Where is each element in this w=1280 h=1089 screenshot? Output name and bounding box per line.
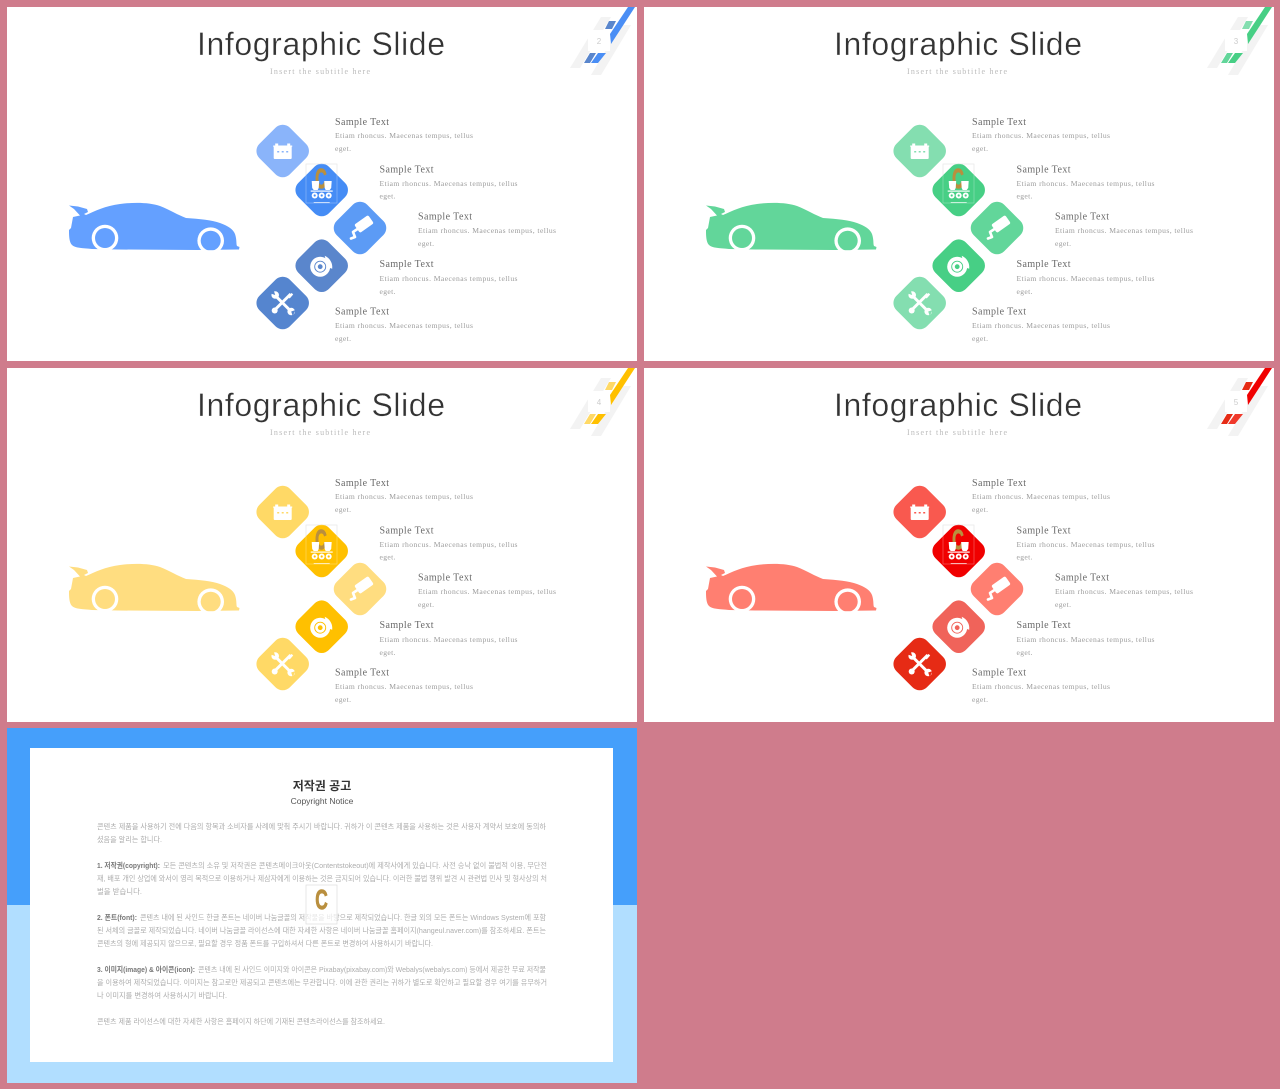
section 3: image and icon: 을 이용하여 제작되었습니다. 이미지는 참고로만 제공되고 콘텐츠에는 무관합니다. 이에 관한 권리는 귀하가 별도로 확인하고 필요할 경우 여기를 유무하거 — [97, 977, 547, 987]
item 4: brake disc — [928, 596, 1155, 657]
corner decoration with page number — [1207, 368, 1272, 436]
item 1: battery: Sample Text — [335, 478, 389, 489]
section 2: font: 된 서체의 글꼴로 제작되었습니다. 네이버 나눔글꼴 라이선스에 대한 자세한 사항은 네이버 나눔글꼴 홈페이지(hangeul.naver.com)를 참조하세요. 폰트는 — [97, 925, 546, 935]
section 1: copyright: 1. 저작권(copyright): — [97, 860, 160, 870]
corner decoration with page number — [1207, 7, 1272, 75]
item 1: battery: eget. — [972, 144, 988, 153]
item 4: brake disc: eget. — [1016, 648, 1033, 657]
item 3: muffler: Sample Text — [418, 212, 472, 222]
item 1: battery: Etiam rhoncus. Maecenas tempus, tellus — [972, 131, 1110, 140]
item 4: brake disc — [291, 596, 518, 657]
item 3: muffler: Sample Text — [418, 572, 472, 584]
item 5: tools: eget. — [972, 695, 988, 704]
corner decoration with page number — [570, 7, 635, 75]
item 2: pistons with watermark: Etiam rhoncus. Maecenas tempus, tellus — [380, 179, 518, 188]
item 4: brake disc: Sample Text — [380, 259, 434, 270]
item 5: tools — [889, 634, 1110, 704]
item 3: muffler — [330, 198, 556, 258]
item 3: muffler — [967, 559, 1193, 619]
item 3: muffler: Etiam rhoncus. Maecenas tempus, tellus — [1055, 587, 1193, 596]
item 2: pistons with watermark: Sample Text — [380, 526, 434, 536]
item 3: muffler: Sample Text — [1055, 572, 1109, 584]
item 5: tools: Sample Text — [972, 306, 1026, 318]
item 5: tools — [252, 273, 473, 343]
car silhouette — [706, 203, 876, 255]
item 2: pistons with watermark — [928, 160, 1155, 220]
subtitle: Insert the subtitle here — [270, 67, 370, 76]
item 4: brake disc: Sample Text — [1016, 620, 1071, 631]
item 3: muffler: eget. — [1055, 239, 1071, 248]
item 2: pistons with watermark: C — [952, 523, 964, 555]
corner decoration with page number: 2 — [597, 37, 602, 46]
item 1: battery: Etiam rhoncus. Maecenas tempus, tellus — [335, 492, 473, 501]
item 2: pistons with watermark: Etiam rhoncus. Maecenas tempus, tellus — [1016, 179, 1155, 188]
intro paragraph: 콘텐츠 제품을 사용하기 전에 다음의 항목과 소비자를 사례에 맞춰 주시기 바랍니다. 귀하가 이 콘텐츠 제품을 사용하는 것은 사용자 계약서 보호에 동의하 — [97, 821, 546, 831]
section 2: font: 2. 폰트(font): — [97, 913, 137, 922]
item 4: brake disc: Etiam rhoncus. Maecenas tempus, tellus — [380, 635, 518, 644]
item 1: battery: Etiam rhoncus. Maecenas tempus, tellus — [335, 131, 473, 140]
item 2: pistons with watermark: Etiam rhoncus. Maecenas tempus, tellus — [1016, 540, 1155, 549]
item 5: tools: Etiam rhoncus. Maecenas tempus, tellus — [335, 321, 473, 330]
section 1: copyright: 벌을 받습니다. — [97, 886, 142, 896]
section 1: copyright: 모든 콘텐츠의 소유 및 저작권은 콘텐츠메이크아웃(Contentstokeout)에 제작사에게 있습니다. 사전 승낙 없이 불법적 이용, 무단전 — [163, 860, 547, 870]
item 2: pistons with watermark: Sample Text — [1016, 164, 1071, 176]
item 1: battery — [889, 478, 1110, 542]
item 1: battery — [252, 478, 473, 542]
car silhouette — [69, 203, 240, 255]
item 2: pistons with watermark — [291, 521, 518, 581]
item 5: tools: Etiam rhoncus. Maecenas tempus, tellus — [972, 321, 1110, 330]
item 1: battery: Sample Text — [972, 478, 1026, 489]
item 3: muffler: Etiam rhoncus. Maecenas tempus, tellus — [418, 587, 556, 596]
item 2: pistons with watermark — [291, 160, 518, 220]
item 5: tools: eget. — [335, 334, 351, 343]
corner decoration with page number: 4 — [597, 398, 602, 407]
item 2: pistons with watermark: eget. — [380, 552, 396, 562]
panel: red slide — [644, 368, 1274, 722]
intro paragraph: 셨음을 알리는 합니다. — [97, 835, 162, 844]
item 1: battery — [252, 117, 473, 181]
item 2: pistons with watermark — [928, 521, 1155, 581]
closing line: 콘텐츠 제품 라이선스에 대한 자세한 사항은 홈페이지 하단에 기재된 콘텐츠라이선스를 참조하세요. — [97, 1016, 385, 1026]
panel: green slide — [644, 7, 1274, 361]
item 1: battery: Sample Text — [972, 117, 1026, 128]
item 2: pistons with watermark: Etiam rhoncus. Maecenas tempus, tellus — [380, 540, 518, 549]
section 3: image and icon — [97, 964, 547, 1000]
watermark frame — [306, 885, 337, 924]
item 3: muffler: Sample Text — [1055, 212, 1109, 222]
section 2: font: 콘텐츠의 형에 제공되지 않으므로, 필요할 경우 정품 폰트를 구입하셔서 다른 폰트로 변경하여 사용하시기 바랍니다. — [97, 938, 433, 948]
car silhouette — [69, 564, 240, 616]
item 5: tools: Sample Text — [972, 668, 1026, 678]
item 5: tools — [889, 273, 1110, 343]
item 4: brake disc: Sample Text — [1016, 259, 1071, 270]
item 4: brake disc: eget. — [380, 648, 396, 657]
subtitle: Insert the subtitle here — [907, 67, 1007, 76]
section 1: copyright: 재, 배포 개인 상업에 와서이 영리 목적으로 이용하거나 제삼자에게 이용하는 것은 금지되어 있습니다. 이러한 불법 행위 발견 시 관련법 민사 및 형사상의 처 — [97, 873, 547, 883]
item 2: pistons with watermark: eget. — [380, 192, 396, 200]
item 2: pistons with watermark: eget. — [1016, 552, 1033, 562]
item 2: pistons with watermark: eget. — [1016, 192, 1033, 200]
section 3: image and icon: 콘텐츠 내에 된 사인드 이미지와 아이콘은 Pixabay(pixabay.com)와 Webalys(webalys.com) 등에서 제공한 무료 저작물 — [198, 964, 546, 974]
item 1: battery: eget. — [335, 505, 351, 514]
item 1: battery: eget. — [335, 144, 351, 153]
section 1: copyright — [97, 860, 547, 896]
corner decoration with page number — [570, 368, 635, 436]
item 4: brake disc — [928, 235, 1155, 296]
item 3: muffler: eget. — [418, 600, 434, 609]
item 4: brake disc — [291, 235, 518, 296]
corner decoration with page number: 3 — [1234, 37, 1239, 46]
item 5: tools: Sample Text — [335, 668, 389, 678]
item 5: tools: Sample Text — [335, 306, 389, 318]
item 3: muffler: Etiam rhoncus. Maecenas tempus, tellus — [418, 226, 556, 235]
item 2: pistons with watermark: C — [315, 523, 327, 555]
item 5: tools: eget. — [972, 334, 988, 343]
item 4: brake disc: eget. — [380, 287, 396, 296]
item 2: pistons with watermark: C — [952, 162, 964, 194]
title: Infographic Slide — [197, 387, 445, 423]
item 1: battery: Sample Text — [335, 117, 389, 128]
item 3: muffler: Etiam rhoncus. Maecenas tempus, tellus — [1055, 226, 1193, 235]
panel: copyright notice — [7, 728, 637, 1083]
item 5: tools: eget. — [335, 695, 351, 704]
item 2: pistons with watermark: C — [315, 162, 327, 194]
item 2: pistons with watermark: Sample Text — [1016, 526, 1071, 536]
item 5: tools: Etiam rhoncus. Maecenas tempus, tellus — [335, 682, 473, 691]
subtitle: Insert the subtitle here — [907, 428, 1007, 437]
item 3: muffler — [330, 559, 556, 619]
car silhouette — [706, 564, 876, 616]
section 3: image and icon: 3. 이미지(image) & 아이콘(icon): — [97, 964, 195, 974]
item 1: battery — [889, 117, 1110, 181]
notice subheading: Copyright Notice — [291, 796, 354, 806]
item 5: tools: Etiam rhoncus. Maecenas tempus, tellus — [972, 682, 1110, 691]
item 4: brake disc: Etiam rhoncus. Maecenas tempus, tellus — [1016, 635, 1155, 644]
intro paragraph — [97, 821, 546, 844]
item 5: tools — [252, 634, 473, 704]
section 2: font — [97, 912, 546, 948]
item 4: brake disc: eget. — [1016, 287, 1033, 296]
title: Infographic Slide — [834, 26, 1082, 62]
item 4: brake disc: Etiam rhoncus. Maecenas tempus, tellus — [1016, 274, 1155, 283]
item 1: battery: eget. — [972, 505, 988, 514]
watermark letter: C — [315, 884, 328, 915]
item 2: pistons with watermark: Sample Text — [380, 164, 434, 176]
item 4: brake disc: Etiam rhoncus. Maecenas tempus, tellus — [380, 274, 518, 283]
title: Infographic Slide — [834, 387, 1082, 423]
panel: yellow slide — [7, 368, 637, 722]
item 3: muffler: eget. — [1055, 600, 1071, 609]
notice heading: 저작권 공고 — [293, 778, 351, 793]
corner decoration with page number: 5 — [1234, 398, 1239, 407]
item 3: muffler — [967, 198, 1193, 258]
item 4: brake disc: Sample Text — [380, 620, 434, 631]
subtitle: Insert the subtitle here — [270, 428, 370, 437]
item 1: battery: Etiam rhoncus. Maecenas tempus, tellus — [972, 492, 1110, 501]
item 3: muffler: eget. — [418, 239, 434, 248]
section 2: font: 콘텐츠 내에 된 사인드 한글 폰트는 네이버 나눔글꼴의 저작물을 바탕으로 제작되었습니다. 한글 외의 모든 폰트는 Windows System에 포함 — [140, 912, 546, 922]
panel: blue slide — [7, 7, 637, 361]
section 3: image and icon: 나 이미지를 변경하여 사용하시기 바랍니다. — [97, 990, 227, 1000]
title: Infographic Slide — [197, 26, 445, 62]
